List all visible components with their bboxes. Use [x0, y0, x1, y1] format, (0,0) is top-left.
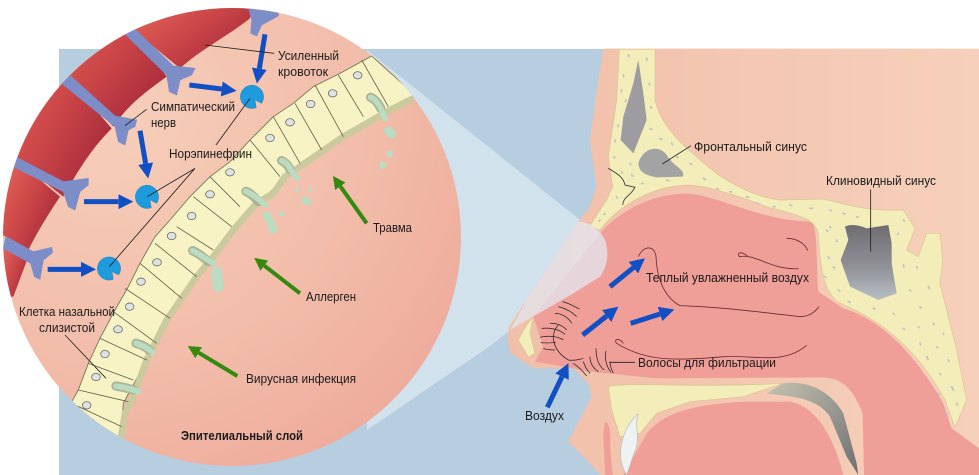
lower cavity [623, 402, 843, 475]
label: warm humidified air: Теплый увлажненный воздух [646, 271, 810, 285]
background: blue panel [59, 49, 619, 475]
label: filtering hairs: Волосы для фильтрации [638, 356, 776, 370]
nasal cavity [533, 193, 979, 475]
label: nasal mucosa cell line 2: слизистой [39, 321, 95, 335]
frontal sinus upper [621, 60, 647, 153]
soft palate [767, 383, 858, 475]
label: norepinephrine: Норэпинефрин [169, 147, 252, 161]
label: frontal sinus: Фронтальный синус [694, 140, 807, 154]
skin silhouette [508, 49, 979, 475]
sympathetic nerves [3, 7, 278, 279]
leader lines [609, 146, 871, 362]
label: allergen: Аллерген [306, 290, 356, 304]
tooth [621, 413, 638, 475]
heading: epithelial layer: Эпителиальный слой [181, 429, 303, 443]
circle background [3, 8, 461, 466]
label: sphenoid sinus: Клиновидный синус [826, 174, 936, 188]
label: trauma: Травма [373, 221, 412, 235]
label: air: Воздух [525, 409, 565, 423]
skull bone [589, 49, 967, 427]
cell nuclei [82, 72, 362, 409]
label: nasal mucosa cell: Клетка назальной [19, 305, 115, 319]
translucent nose overlay [510, 222, 607, 330]
mucus secretions [116, 97, 392, 392]
clipped detail contents [0, 0, 415, 440]
blood vessel [0, 0, 253, 297]
panel: head cross-section [508, 49, 979, 475]
label: sympathetic nerve line 2: нерв [151, 116, 176, 130]
sphenoid sinus [841, 225, 897, 300]
panel: magnified epithelium circle [0, 0, 461, 466]
bone pores [599, 55, 957, 421]
nasal hairs [540, 302, 613, 376]
cell dividers [75, 60, 388, 427]
zoom beam from circle to nose [367, 50, 580, 430]
green arrows [199, 186, 367, 376]
scaled drawing [0, 0, 415, 440]
receptors [97, 85, 264, 280]
mucus pocket outlines [116, 97, 381, 390]
leader lines [65, 45, 274, 378]
label: viral infection: Вирусная инфекция [246, 372, 356, 386]
palate bone [608, 383, 783, 437]
label: increased blood flow line 2: кровоток [278, 65, 329, 79]
nose cartilage [518, 317, 535, 357]
basement membrane [121, 98, 413, 440]
label: increased blood flow: Усиленный [278, 49, 339, 63]
frontal sinus lower [638, 149, 683, 177]
turbinate lines [608, 168, 819, 359]
label: sympathetic nerve: Симпатический [151, 100, 235, 114]
blue airflow arrows [547, 268, 660, 407]
epithelial cell layer [72, 56, 415, 440]
lip [603, 422, 613, 475]
blue arrows [48, 34, 265, 269]
